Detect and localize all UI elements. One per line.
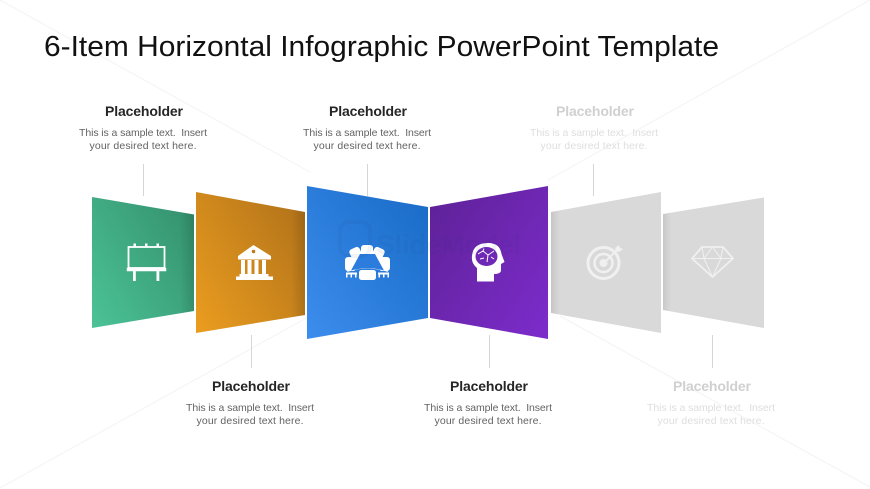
- text block: item 3: Placeholder: [329, 103, 408, 119]
- title: 6-Item Horizontal Infographic PowerPoint Template: [44, 31, 719, 63]
- text block: item 6: Placeholder: [673, 378, 752, 394]
- text block: item 5: your desired text here.: [540, 140, 648, 152]
- text block: item 1: your desired text here.: [90, 140, 196, 152]
- text block: item 1: [79, 103, 207, 152]
- text block: item 4: This is a sample text. Insert: [424, 402, 552, 414]
- icon: diamond: [692, 247, 733, 277]
- text block: item 5: Placeholder: [556, 103, 635, 119]
- text block: item 1: This is a sample text. Insert: [79, 127, 207, 139]
- icon: target with arrow: [588, 245, 623, 278]
- text block: item 6: [647, 378, 775, 427]
- text block: item 3: This is a sample text. Insert: [303, 127, 431, 139]
- text block: item 6: your desired text here.: [658, 415, 764, 427]
- text block: item 5: [530, 103, 658, 152]
- text block: item 1: Placeholder: [105, 103, 184, 119]
- text block: item 2: your desired text here.: [196, 415, 304, 427]
- text block: item 4: [424, 378, 552, 427]
- panel: item 5 grey: [551, 192, 661, 333]
- panel: item 3 blue: [307, 186, 428, 339]
- panel: item 2 orange: [196, 192, 305, 333]
- text block: item 4: your desired text here.: [434, 415, 542, 427]
- text block: item 5: This is a sample text. Insert: [530, 127, 658, 139]
- icon: conference table: [345, 245, 390, 280]
- text block: item 4: Placeholder: [450, 378, 529, 394]
- text block: item 6: This is a sample text. Insert: [647, 402, 775, 414]
- text block: item 2: This is a sample text. Insert: [186, 402, 314, 414]
- connector lines: [144, 164, 712, 368]
- panel: item 1 green: [92, 197, 194, 328]
- watermark logo: [340, 222, 521, 260]
- watermark logo: SlideModel: [376, 229, 521, 260]
- icon: billboard: [127, 244, 166, 281]
- panel: item 4 purple: [430, 186, 548, 339]
- panel: item 6 grey: [663, 198, 764, 328]
- icon: head with brain: [472, 243, 504, 282]
- text block: item 3: your desired text here.: [314, 140, 420, 152]
- text block: item 2: [186, 378, 314, 427]
- icon: bank building: [236, 245, 273, 280]
- text block: item 2: Placeholder: [212, 378, 291, 394]
- text block: item 3: [303, 103, 431, 152]
